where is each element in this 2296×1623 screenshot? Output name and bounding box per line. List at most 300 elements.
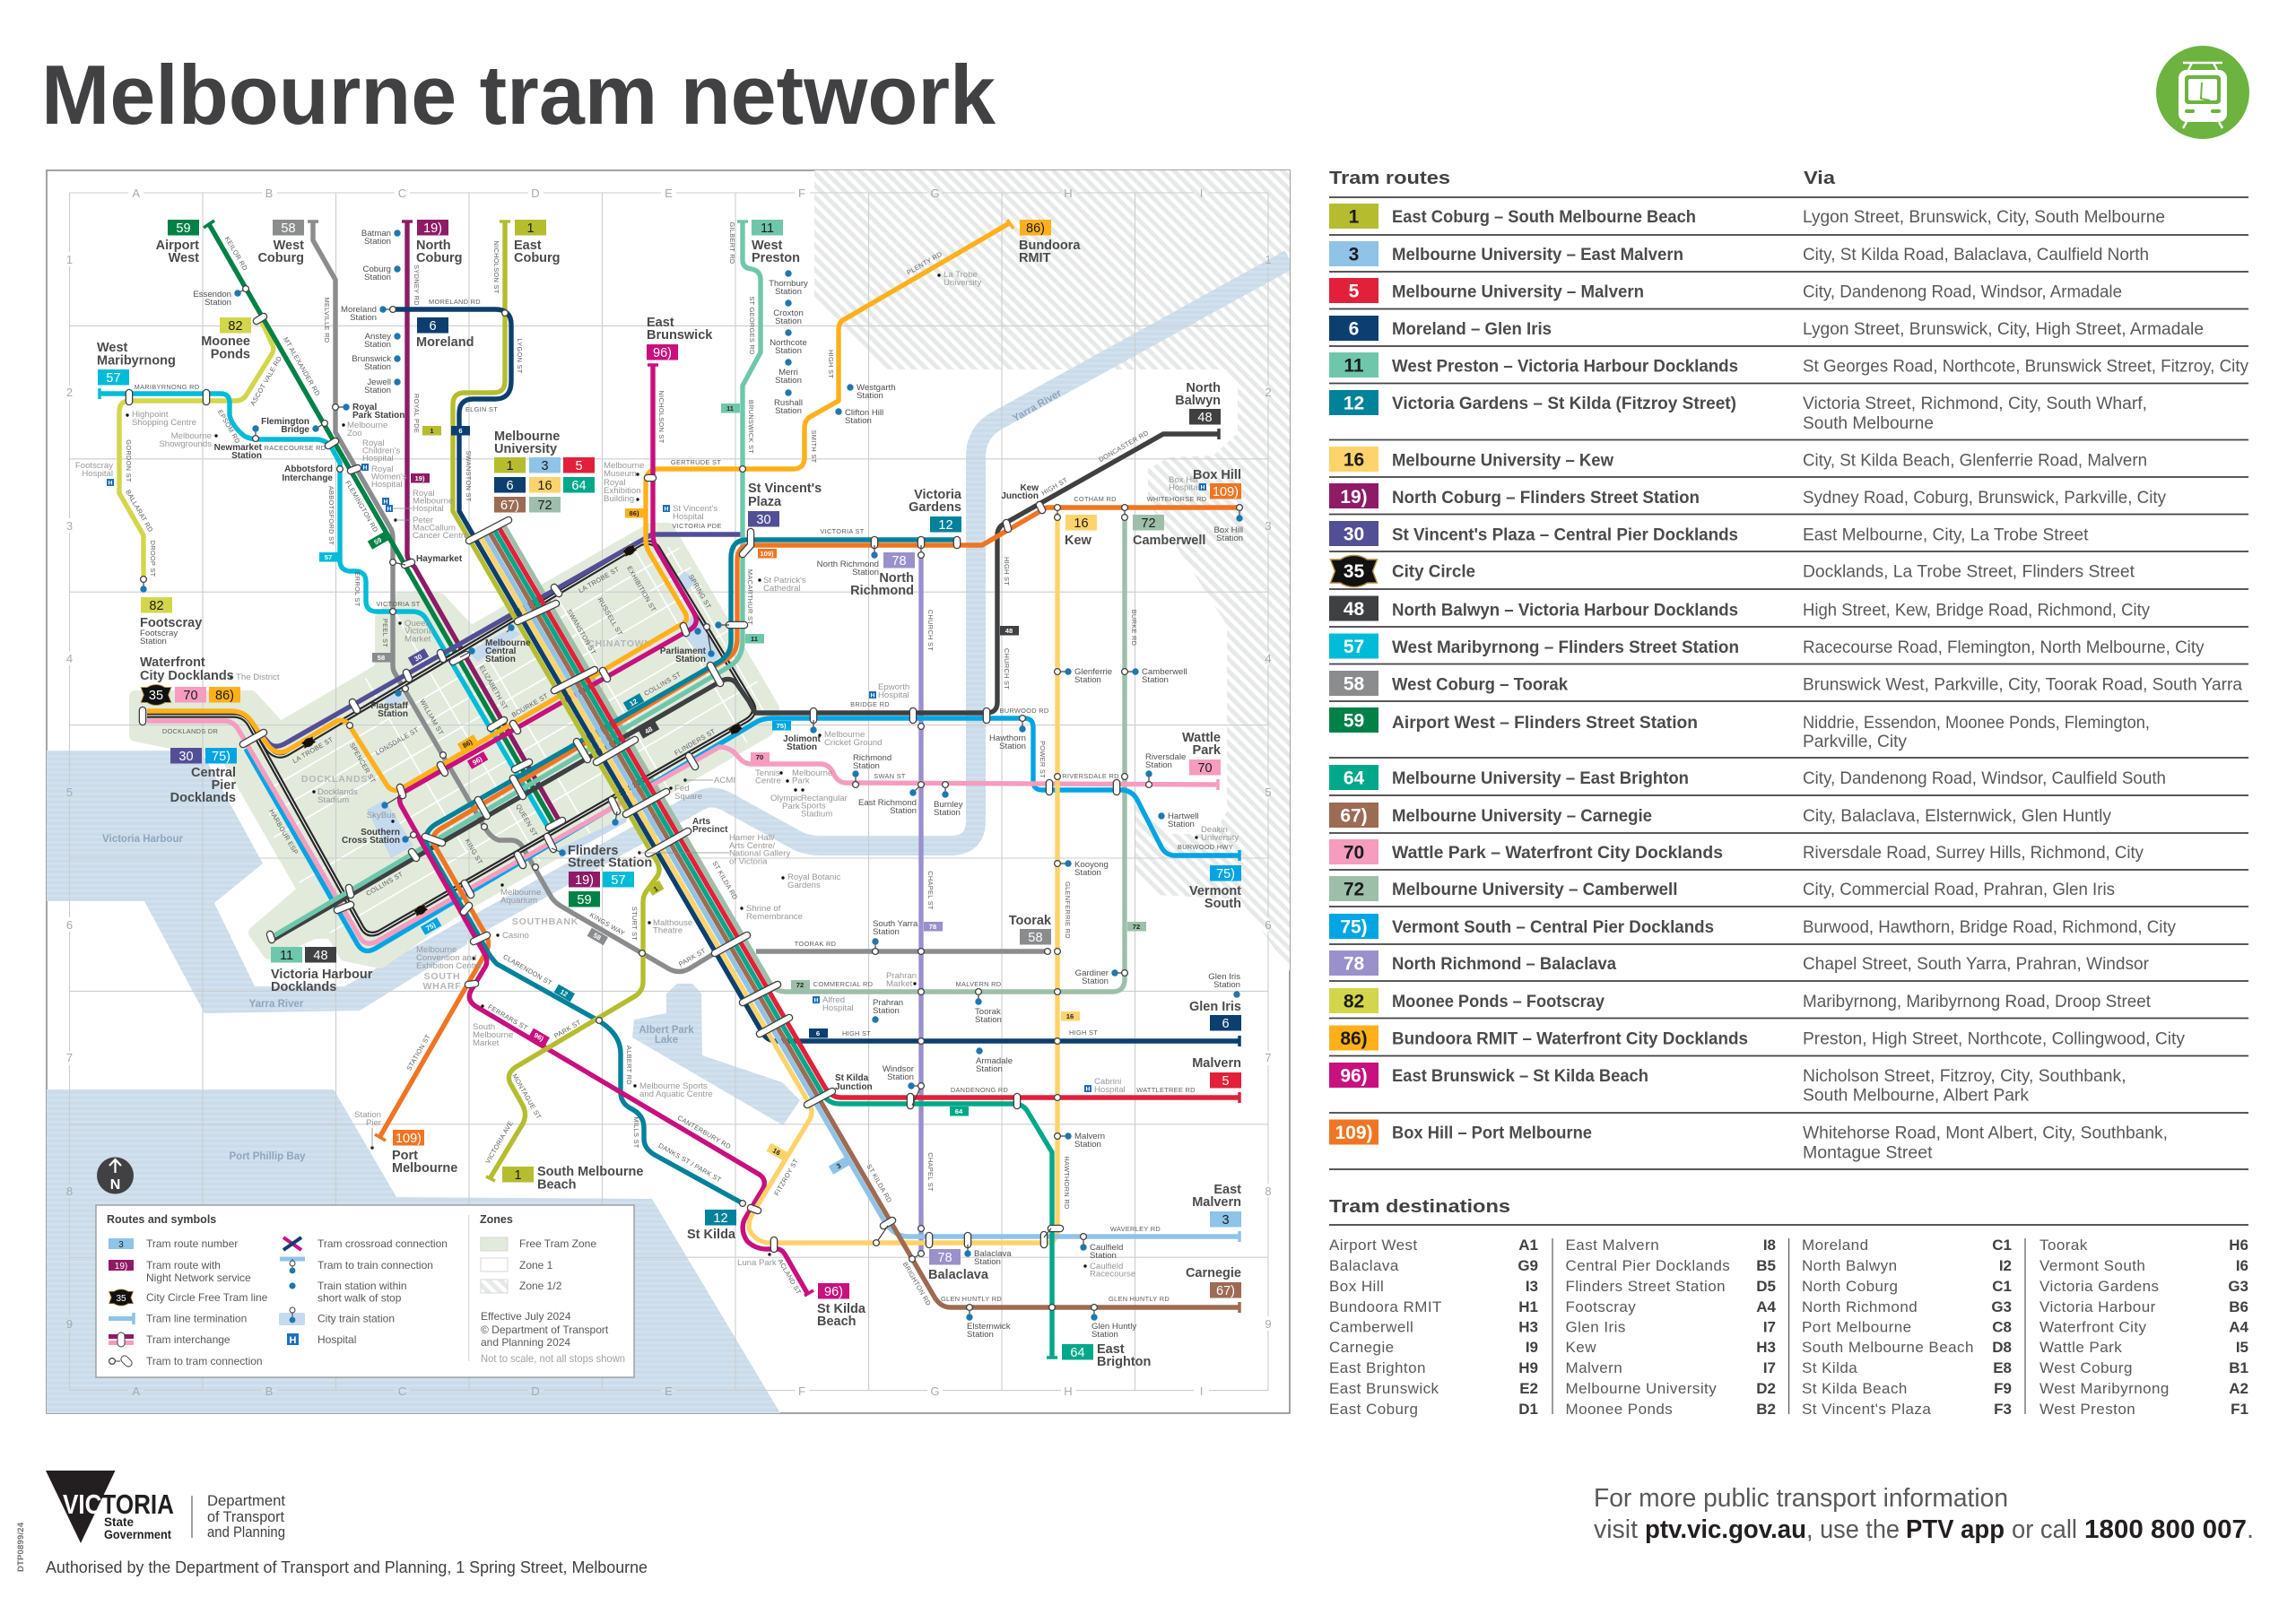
footer: Victoria government logo: Government xyxy=(104,1528,171,1541)
route number badges: 64 xyxy=(1070,1346,1085,1360)
hospital icons: H xyxy=(384,499,388,506)
route row 3: Melbourne University – East Malvern xyxy=(1392,245,1683,265)
water and area names: SOUTHBANK xyxy=(512,916,578,927)
destinations column 3: G3 xyxy=(1991,1298,2012,1315)
street names: EXHIBITION ST xyxy=(625,565,658,613)
destination names xyxy=(97,239,1241,1369)
route number badges: 96) xyxy=(653,346,672,360)
street names: COTHAM RD xyxy=(1074,495,1117,503)
points of interest names: Exhibition xyxy=(604,486,641,496)
station names: Station xyxy=(1216,534,1243,543)
points of interest dots xyxy=(126,273,1198,1268)
street names: RACECOURSE RD xyxy=(265,444,326,452)
route number badges: 16 xyxy=(537,479,552,493)
water and area names: Victoria Harbour xyxy=(102,834,183,845)
route 48 xyxy=(273,434,1219,940)
street names: KING ST xyxy=(464,838,484,866)
station names: Coburg xyxy=(363,265,391,274)
station names: Station xyxy=(1145,760,1172,770)
destinations column 1: H1 xyxy=(1518,1298,1538,1315)
street names: COMMERCIAL RD xyxy=(813,980,873,988)
route row 3 xyxy=(1329,241,2248,272)
points of interest names: Market xyxy=(886,979,913,989)
street names: DANDENONG RD xyxy=(951,1086,1008,1094)
route row 57 xyxy=(1329,633,2248,664)
legend: tram route number: 3 xyxy=(118,1240,124,1250)
street names: VICTORIA ST xyxy=(376,600,421,608)
zone 1/2 hatched area xyxy=(814,170,1290,971)
in-line route tags: 58 xyxy=(592,931,603,942)
destination names: Moreland xyxy=(416,335,474,350)
street names: KEILOR RD xyxy=(223,235,249,272)
water and area names: CHINATOWN xyxy=(587,638,652,649)
station names: Station xyxy=(934,808,961,818)
legend: hospital xyxy=(287,1333,356,1346)
points of interest names: Melbourne xyxy=(500,888,541,898)
route number badges: 48 xyxy=(1197,411,1213,425)
points of interest names: Exhibition Centre xyxy=(416,961,482,971)
route number badges: 57 xyxy=(611,873,626,888)
street names: ASCOT VALE RD xyxy=(248,354,283,407)
destination names: Box Hill xyxy=(1193,468,1241,482)
points of interest names: Rectangular xyxy=(801,794,848,803)
destinations column 4: B6 xyxy=(2229,1298,2248,1315)
street names: BOURKE ST xyxy=(510,691,550,719)
destination names: Melbourne xyxy=(494,430,560,444)
legend: termination: Tram line termination xyxy=(146,1313,247,1325)
route row 75: 75) xyxy=(1340,916,1368,938)
route row 1: Lygon Street, Brunswick, City, South Melbourne xyxy=(1803,208,2165,227)
route number badges: 72 xyxy=(1141,516,1156,531)
grid references: D xyxy=(531,187,540,200)
footer: Victoria government logo: State xyxy=(104,1515,135,1529)
points of interest names: Melbourne xyxy=(473,1030,513,1040)
grid references: C xyxy=(398,187,406,200)
street names: COLLINS ST xyxy=(643,670,683,698)
grid references: 1 xyxy=(66,253,73,266)
destination names: Victoria xyxy=(914,488,961,502)
icon: tram logo xyxy=(2156,46,2249,139)
points of interest names: Melbourne xyxy=(416,945,457,955)
route 6 xyxy=(394,309,1239,1041)
street names xyxy=(124,221,1233,1307)
route row 58: 58 xyxy=(1344,674,1364,694)
points of interest names: Hospital xyxy=(371,480,403,490)
route row 78: 78 xyxy=(1344,954,1364,974)
points of interest names: Building xyxy=(604,494,634,504)
route 12 xyxy=(426,540,958,1203)
free tram zone xyxy=(135,529,773,962)
points of interest names: Royal xyxy=(413,489,435,499)
station names xyxy=(140,229,1243,1340)
footer: Victoria government logo: of Transport xyxy=(207,1508,284,1525)
legend: effective date: Effective July 2024 xyxy=(481,1310,571,1323)
station names: Station xyxy=(1074,868,1101,878)
legend: train station nearby: short walk of stop xyxy=(317,1291,402,1304)
destination names: West xyxy=(97,341,127,355)
in-line route tags: 6 xyxy=(816,1029,820,1037)
street names: CANTERBURY RD xyxy=(676,1114,733,1150)
route number badges: 86) xyxy=(1026,221,1045,236)
in-line route tags: 75) xyxy=(777,722,787,730)
route row 16: City, St Kilda Beach, Glenferrie Road, Malvern xyxy=(1803,452,2147,470)
route number badges: 48 xyxy=(313,949,328,963)
destinations column 1: Box Hill xyxy=(1329,1278,1384,1295)
points of interest names: Hospital xyxy=(878,690,909,700)
in-line route tags: 86) xyxy=(630,509,639,517)
route row 72: 72 xyxy=(1344,879,1364,900)
station names: Windsor xyxy=(883,1064,914,1074)
points of interest names: Box Hill xyxy=(1169,475,1198,485)
station names: Station xyxy=(485,655,516,664)
station names: Jewell xyxy=(367,378,391,387)
station names: Station xyxy=(775,376,802,386)
street names: HIGH ST xyxy=(827,350,835,378)
legend: night network: Night Network service xyxy=(146,1271,251,1284)
route row 70: Riversdale Road, Surrey Hills, Richmond, City xyxy=(1803,844,2144,863)
legend heading: zones: Zones xyxy=(480,1213,513,1226)
station names: Precinct xyxy=(692,825,728,835)
destination names: Beach xyxy=(537,1178,577,1193)
street names: ERROL ST xyxy=(353,571,361,607)
in-line route tags: 11 xyxy=(751,635,759,643)
route row 58 xyxy=(1329,671,2248,701)
grid references: 7 xyxy=(66,1051,73,1064)
grid references: E xyxy=(665,187,673,200)
footer: contact information: For more public transport information xyxy=(1594,1484,2008,1513)
table: tram destinations xyxy=(1329,1197,2249,1418)
grid references: 5 xyxy=(66,785,73,799)
destinations column 1: Carnegie xyxy=(1329,1339,1395,1356)
in-line route tags: 59 xyxy=(372,535,383,546)
route row 6 xyxy=(1329,316,2248,346)
destination names: Airport xyxy=(156,239,199,253)
destination names: Gardens xyxy=(909,500,961,515)
station names: Station xyxy=(775,317,802,326)
points of interest names: Cabrini xyxy=(1094,1077,1121,1087)
route row 3: City, St Kilda Road, Balaclava, Caulfield North xyxy=(1803,246,2149,265)
station names: Flagstaff xyxy=(370,701,408,711)
street names: BURWOOD HWY xyxy=(1178,843,1233,851)
in-line route tags: 12 xyxy=(559,987,570,998)
destinations column 4: A2 xyxy=(2229,1380,2248,1397)
points of interest names: Royal xyxy=(371,464,394,474)
points of interest names: Children's xyxy=(362,447,401,456)
points of interest names: Hospital xyxy=(82,469,113,479)
destination names: Preston xyxy=(752,251,800,265)
points of interest names: Gardens xyxy=(787,881,821,890)
station names: Footscray xyxy=(140,629,178,638)
destinations column 2: A4 xyxy=(1756,1298,1777,1315)
station names: Flemington xyxy=(261,417,309,427)
destinations column 4: F1 xyxy=(2231,1401,2248,1418)
street names: VICTORIA PDE xyxy=(672,522,722,530)
station names: Station xyxy=(975,1015,1002,1025)
destination names: East xyxy=(1213,1183,1241,1197)
destination names: City Docklands xyxy=(140,669,234,683)
hospital icons: H xyxy=(871,692,875,699)
station names: Malvern xyxy=(1074,1132,1105,1141)
destinations column 1: D1 xyxy=(1518,1401,1538,1418)
legend: effective date: © Department of Transport xyxy=(481,1324,609,1336)
in-line route tags: 11 xyxy=(726,404,735,412)
north arrow xyxy=(97,1157,134,1194)
street names: PARK ST xyxy=(677,946,708,968)
destinations column 1: I9 xyxy=(1526,1339,1538,1356)
station names: Station xyxy=(852,568,879,577)
route row 64: Melbourne University – East Brighton xyxy=(1392,768,1689,788)
legend xyxy=(96,1205,634,1377)
legend: hospital: Hospital xyxy=(317,1333,356,1346)
route row 16 xyxy=(1329,447,2248,477)
street names: ALBERT RD xyxy=(625,1046,633,1085)
street names: DONCASTER RD xyxy=(1097,429,1150,464)
street names: ROYAL PDE xyxy=(413,394,421,433)
hospital icons xyxy=(107,464,1206,1092)
hospital icons: H xyxy=(1201,484,1205,491)
destination names: Glen Iris xyxy=(1189,1000,1241,1014)
route row 1 xyxy=(1329,204,2248,235)
grid references: A xyxy=(132,187,140,200)
destination names: Waterfront xyxy=(140,655,205,670)
route number badges: 78 xyxy=(891,554,907,568)
legend: night network: Tram route with xyxy=(146,1259,221,1271)
destinations column 1: G9 xyxy=(1518,1257,1538,1274)
route row 75: Burwood, Hawthorn, Bridge Road, Richmond, City xyxy=(1803,918,2176,937)
destination names: Coburg xyxy=(514,251,561,265)
destinations column 4: B1 xyxy=(2229,1359,2248,1376)
route row 12: Victoria Street, Richmond, City, South Wharf, xyxy=(1803,395,2147,413)
destinations column 1: E2 xyxy=(1519,1380,1538,1397)
route number badges: 59 xyxy=(176,221,191,236)
station names: Armadale xyxy=(976,1056,1013,1066)
connector stubs xyxy=(144,289,1239,1317)
route number badges: 12 xyxy=(713,1211,728,1226)
destinations column 4: I5 xyxy=(2236,1339,2248,1356)
points of interest names: of Victoria xyxy=(729,856,768,866)
street names: FERRARS ST xyxy=(486,1002,529,1032)
destination names: Moonee xyxy=(201,334,250,349)
street names: FITZROY ST xyxy=(772,1157,800,1197)
grid references: 4 xyxy=(1265,652,1272,665)
destination names: Vermont xyxy=(1189,884,1241,898)
destinations column 1: Balaclava xyxy=(1329,1257,1399,1274)
station names: Arts xyxy=(692,817,710,827)
destinations column 3: Port Melbourne xyxy=(1802,1318,1912,1336)
table header: Via xyxy=(1804,169,1836,188)
street names: WHITEHORSE RD xyxy=(1147,495,1206,503)
station names: Anstey xyxy=(365,332,391,342)
station names: Riversdale xyxy=(1145,752,1186,762)
destinations column 2: H3 xyxy=(1756,1339,1776,1356)
destinations column 3: I2 xyxy=(1999,1257,2012,1274)
points of interest names: University xyxy=(1201,833,1239,843)
street names: HIGH ST xyxy=(842,1029,871,1037)
street names: LONSDALE ST xyxy=(374,725,421,757)
route row 30 xyxy=(1329,521,2248,551)
station names: Gardiner xyxy=(1075,968,1109,978)
station names: Station xyxy=(999,742,1026,751)
grid references: 6 xyxy=(1265,918,1272,932)
in-line route tags: 1 xyxy=(430,427,434,435)
street names: COLLINS ST xyxy=(365,870,404,898)
station names: Croxton xyxy=(773,308,804,318)
station names: Balaclava xyxy=(974,1249,1012,1259)
destination names: Balaclava xyxy=(928,1268,989,1282)
street names: SYDNEY RD xyxy=(413,265,421,306)
street names: MONTAGUE ST xyxy=(510,1072,544,1121)
legend: interchange xyxy=(109,1332,230,1347)
route 30 xyxy=(262,534,744,746)
route number badges: 58 xyxy=(1028,931,1043,945)
route row 86: Preston, High Street, Northcote, Collingwood, City xyxy=(1803,1029,2186,1049)
table header: Tram routes xyxy=(1329,169,1450,188)
legend: tram to tram: Tram to tram connection xyxy=(146,1355,263,1367)
route row 58: Brunswick West, Parkville, City, Toorak Road, South Yarra xyxy=(1803,676,2242,694)
station names: Station xyxy=(853,761,880,771)
station names: Station xyxy=(378,709,408,719)
grid references: E xyxy=(665,1384,673,1398)
street names: BURKE RD xyxy=(1130,610,1138,646)
points of interest names: Victoria xyxy=(404,627,433,637)
destination names: Carnegie xyxy=(1186,1266,1241,1280)
street names: HIGH ST xyxy=(1003,557,1011,586)
route row 96: 96) xyxy=(1340,1065,1368,1087)
destination names: Flinders xyxy=(568,844,618,858)
points of interest names: ACMI xyxy=(714,776,735,785)
station names: Station xyxy=(1074,675,1101,685)
station names: Station xyxy=(775,406,802,416)
street names: DANKS ST / PARK ST xyxy=(657,1141,723,1184)
route 64 xyxy=(493,528,1052,1358)
station names: Junction xyxy=(1001,491,1039,501)
legend: zones swatches xyxy=(481,1237,596,1293)
hospital icons: H xyxy=(665,506,669,513)
station names: Glenferrie xyxy=(1074,667,1112,677)
street names: MILLS ST xyxy=(632,1116,640,1149)
grid references: 6 xyxy=(66,918,73,932)
street names: HARBOUR ESP xyxy=(267,808,300,856)
destinations column 3: St Kilda Beach xyxy=(1802,1380,1908,1397)
grid references: 1 xyxy=(1265,253,1272,266)
route number badges: 109) xyxy=(1213,485,1239,499)
destinations column 1: East Brighton xyxy=(1329,1359,1426,1376)
footer: contact information: . xyxy=(2247,1515,2254,1544)
route 82 xyxy=(119,320,274,580)
route number badges: 19) xyxy=(575,873,594,888)
street names: RIVERSDALE RD xyxy=(1062,772,1119,780)
route number badges: 16 xyxy=(1074,516,1089,531)
in-line route tags xyxy=(319,404,1146,1175)
route row 11: 11 xyxy=(1344,355,1364,377)
destinations column 4: I6 xyxy=(2236,1257,2248,1274)
station names: Newmarket xyxy=(214,443,262,453)
street names: ST KILDA RD xyxy=(865,1163,893,1204)
station names: Merri xyxy=(778,368,798,378)
route row 86 xyxy=(1329,1026,2248,1056)
water and area names: Yarra River xyxy=(249,999,304,1010)
route row 57: 57 xyxy=(1344,637,1364,657)
route row 75 xyxy=(1329,914,2248,944)
points of interest names: The District xyxy=(236,673,280,682)
footer: Victoria government logo xyxy=(46,1471,285,1543)
in-line route tags: 96) xyxy=(471,755,484,767)
station names: Hawthorn xyxy=(989,733,1026,743)
route 67 xyxy=(489,531,1239,1307)
destinations column 3: D8 xyxy=(1992,1339,2012,1356)
destination names: West xyxy=(752,239,782,253)
street names: ELGIN ST xyxy=(465,405,498,413)
route number badges: 78 xyxy=(937,1251,952,1265)
route row 96: Nicholson Street, Fitzroy, City, Southbank, xyxy=(1803,1067,2126,1086)
line terminations xyxy=(100,220,1239,1358)
route row 78: Chapel Street, South Yarra, Prahran, Windsor xyxy=(1803,955,2150,974)
route row 59: Airport West – Flinders Street Station xyxy=(1392,713,1698,733)
destinations column 3: St Kilda xyxy=(1802,1359,1857,1376)
destinations column 2: Central Pier Docklands xyxy=(1566,1257,1730,1274)
in-line route tags: 16 xyxy=(1066,1012,1074,1020)
destinations column 1: A1 xyxy=(1518,1237,1538,1254)
route row 67: 67) xyxy=(1340,805,1368,827)
grid references: 9 xyxy=(1265,1317,1272,1331)
route row 5: Melbourne University – Malvern xyxy=(1392,282,1644,301)
points of interest names: Prahran xyxy=(886,971,917,981)
route row 16: 16 xyxy=(1344,450,1364,470)
in-line route tags: 1 xyxy=(652,884,660,893)
destinations column 2: Kew xyxy=(1566,1339,1596,1356)
route 16 xyxy=(479,513,1057,1243)
points of interest names: Melbourne xyxy=(604,461,644,471)
station names: Batman xyxy=(361,229,391,239)
destination names: Ponds xyxy=(211,348,250,362)
route 5 xyxy=(498,525,1239,1098)
route number badges: 75) xyxy=(1216,867,1235,881)
destination names: Camberwell xyxy=(1133,534,1205,548)
route row 109: Whitehorse Road, Mont Albert, City, Southbank, xyxy=(1803,1124,2168,1142)
points of interest names: Hospital xyxy=(413,504,444,514)
route row 48: 48 xyxy=(1344,599,1364,620)
destination names: East xyxy=(647,316,674,330)
station names: Station xyxy=(140,637,167,647)
legend: train station nearby: Train station within xyxy=(317,1280,407,1292)
grid references: 9 xyxy=(66,1317,73,1331)
destination names: Docklands xyxy=(170,791,236,805)
station names: Station xyxy=(350,313,377,323)
footer: contact information: ptv.vic.gov.au xyxy=(1645,1515,1806,1544)
destinations column 4: A4 xyxy=(2229,1318,2249,1336)
points of interest names: Zoo xyxy=(347,429,362,438)
points of interest names: Peter xyxy=(413,516,433,525)
street names: FLEMINGTON RD xyxy=(344,479,380,534)
street names: POWER ST xyxy=(1039,741,1047,778)
station names: Station xyxy=(873,927,900,937)
destinations column 3: C8 xyxy=(1992,1318,2012,1336)
route number badges: 19) xyxy=(423,221,442,236)
destinations column 2: I8 xyxy=(1763,1237,1776,1254)
destinations column 4: West Coburg xyxy=(2039,1359,2133,1376)
points of interest names: Docklands xyxy=(317,787,358,797)
route number badges: 1 xyxy=(514,1168,522,1183)
route row 78 xyxy=(1329,950,2248,981)
points of interest names: University xyxy=(944,278,981,288)
route number badges: 109) xyxy=(396,1132,422,1146)
legend: tram to tram xyxy=(109,1354,263,1368)
destinations column 2: Melbourne University xyxy=(1566,1380,1717,1397)
station names: Royal xyxy=(352,403,377,412)
station names: Station xyxy=(974,1257,1001,1267)
legend: tram to train: Tram to train connection xyxy=(317,1259,433,1271)
route 19 xyxy=(407,221,561,823)
